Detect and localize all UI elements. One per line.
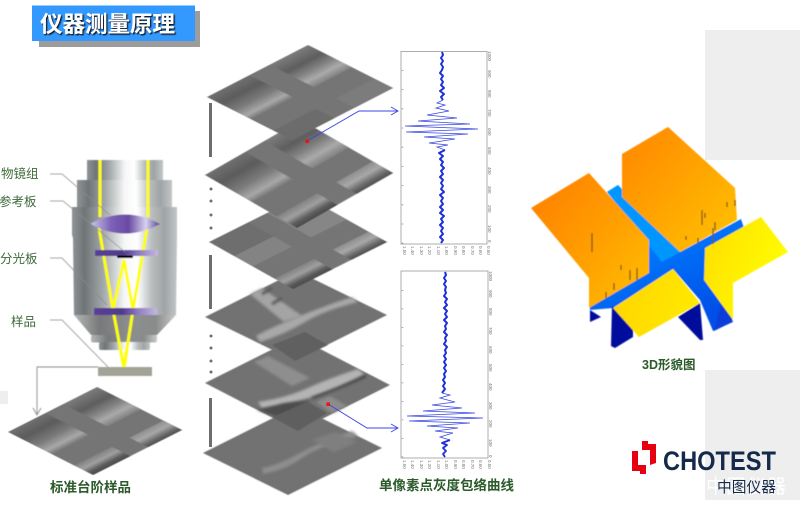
plate 4 — [205, 271, 387, 361]
image stack — [203, 45, 393, 495]
caption: single pixel envelope curve: 单像素点灰度包络曲线 — [379, 477, 514, 493]
label: objective group: 物镜组 — [1, 166, 39, 181]
chart: lower pixel intensity envelope: 1000 — [488, 271, 493, 282]
arrow: lower pixel to chart — [326, 402, 398, 432]
leader lines — [50, 174, 125, 367]
chart: upper pixel intensity envelope: 300 — [487, 186, 492, 194]
chart: lower pixel intensity envelope: 0.70 — [470, 460, 475, 469]
label: sample: 样品 — [11, 314, 36, 329]
lens group — [90, 214, 160, 234]
spikes — [592, 200, 735, 298]
background panel: upper right — [705, 30, 800, 160]
chart: upper pixel intensity envelope: 0.80 — [461, 246, 466, 255]
yellow block front — [613, 269, 700, 337]
chart: upper pixel intensity envelope: 100 — [487, 225, 492, 233]
arrow: upper pixel to chart — [306, 107, 398, 143]
chart: upper pixel intensity envelope: 0.90 — [453, 246, 458, 255]
chart: upper pixel intensity envelope: 0.70 — [470, 246, 475, 255]
objective lens diagram — [33, 160, 177, 415]
label: reference plate: 参考板 — [0, 194, 37, 209]
chart: lower pixel intensity envelope: 100 — [488, 439, 493, 447]
chart: lower pixel intensity envelope: 0 — [488, 455, 493, 458]
chart: lower pixel intensity envelope: 1.20 — [427, 460, 432, 469]
chart: lower pixel intensity envelope: 600 — [488, 346, 493, 354]
plate 6 — [203, 406, 382, 495]
orange block upper — [622, 127, 737, 252]
scan position markers — [209, 103, 212, 447]
chart: lower pixel intensity envelope: 700 — [488, 327, 493, 335]
chart: upper pixel intensity envelope: 500 — [487, 147, 492, 155]
caption: standard step sample: 标准台阶样品 — [50, 479, 131, 495]
logo — [632, 441, 786, 498]
chart: lower pixel intensity envelope: 300 — [488, 402, 493, 410]
chart: lower pixel intensity envelope: 200 — [488, 420, 493, 428]
reference plate — [95, 250, 158, 256]
chart: upper pixel intensity envelope — [401, 51, 492, 255]
chart: upper pixel intensity envelope: 1.20 — [427, 246, 432, 255]
chart: upper pixel intensity envelope: 600 — [487, 128, 492, 136]
chart: upper pixel intensity envelope: 0.60 — [478, 246, 483, 255]
chart: upper pixel intensity envelope: 800 — [487, 90, 492, 98]
plate 3 — [209, 195, 387, 289]
chart: lower pixel intensity envelope: 0.80 — [461, 460, 466, 469]
plate 2 — [205, 120, 393, 228]
yellow light beams — [99, 160, 148, 368]
plate 5 — [205, 337, 390, 431]
chart: lower pixel intensity envelope: 400 — [488, 383, 493, 391]
chart: lower pixel intensity envelope: 1.00 — [444, 460, 449, 469]
chart: upper pixel intensity envelope: 0.50 — [486, 246, 491, 255]
plate 1 — [207, 45, 393, 140]
standard step sample plate — [8, 387, 182, 475]
chart: upper pixel intensity envelope: 400 — [487, 167, 492, 175]
chart: lower pixel intensity envelope: 800 — [488, 308, 493, 316]
chart: lower pixel intensity envelope: 0.90 — [453, 460, 458, 469]
chart: lower pixel intensity envelope: 900 — [488, 290, 493, 298]
chart: upper pixel intensity envelope: 1.30 — [419, 246, 424, 255]
chart: upper pixel intensity envelope: 1.10 — [436, 246, 441, 255]
title: 仪器测量原理 — [40, 12, 175, 37]
chart: upper pixel intensity envelope: 1000 — [487, 51, 492, 62]
chart: lower pixel intensity envelope: 0.50 — [487, 460, 492, 469]
logo wordmark: CHOTEST — [663, 446, 776, 476]
label: beam splitter: 分光板 — [0, 252, 38, 266]
beam splitter — [94, 308, 157, 315]
chart: lower pixel intensity envelope — [401, 271, 493, 469]
blue cross street — [589, 185, 744, 348]
sample block — [98, 367, 152, 376]
arrow from sample to plate — [33, 367, 98, 415]
objective barrel — [72, 160, 177, 350]
title — [32, 6, 200, 47]
chart: lower pixel intensity envelope: 1.50 — [402, 460, 407, 469]
chart: lower pixel intensity envelope: 1.30 — [419, 460, 424, 469]
chart: lower pixel intensity envelope: 0.60 — [478, 460, 483, 469]
chart: lower pixel intensity envelope: 500 — [488, 364, 493, 372]
yellow block right — [704, 217, 788, 320]
logo mark — [632, 441, 656, 474]
chart: upper pixel intensity envelope: 200 — [487, 205, 492, 213]
chart: upper pixel intensity envelope: 1.50 — [402, 246, 407, 255]
orange block left — [531, 173, 649, 308]
chart: upper pixel intensity envelope: 0 — [487, 240, 492, 243]
reference mirror — [117, 256, 133, 258]
logo ghost text: 中图仪器 — [706, 476, 786, 498]
chart: lower pixel intensity envelope: 1.40 — [410, 460, 415, 469]
logo chinese name: 中图仪器 — [717, 479, 776, 496]
chart: upper pixel intensity envelope: 1.00 — [444, 246, 449, 255]
background panel: lower right — [705, 370, 800, 500]
chart: lower pixel intensity envelope: 1.10 — [436, 460, 441, 469]
caption: 3D topography: 3D形貌图 — [642, 357, 695, 372]
chart: upper pixel intensity envelope: 700 — [487, 109, 492, 117]
chart: upper pixel intensity envelope: 900 — [487, 70, 492, 78]
3D topography chart — [531, 127, 788, 348]
chart: upper pixel intensity envelope: 1.40 — [410, 246, 415, 255]
background panel: left swatch — [0, 391, 8, 404]
